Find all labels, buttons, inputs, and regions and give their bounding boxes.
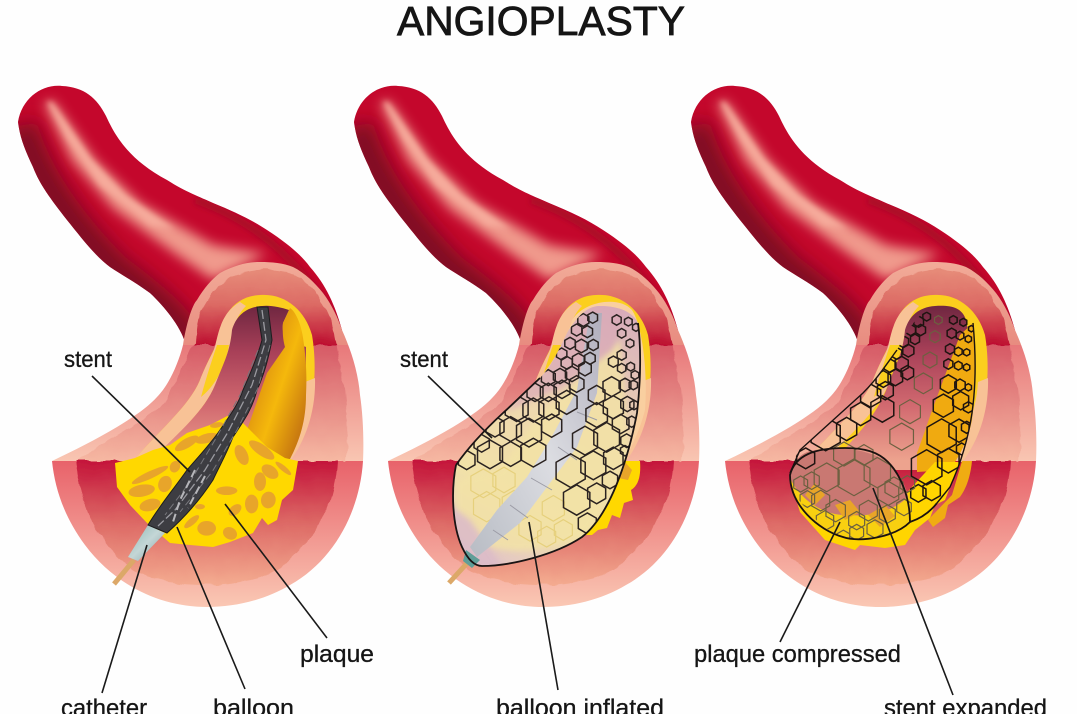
faint stent cells behind the balloon — [471, 467, 572, 547]
catheter sleeve — [463, 550, 480, 568]
faint stent cells inside the lumen and over the plaque — [794, 316, 942, 545]
catheter tip — [114, 560, 134, 584]
label: plaque compressed: plaque compressed — [694, 641, 901, 668]
catheter sleeve — [128, 525, 165, 561]
compressed plaque at the stent mouth — [790, 448, 910, 539]
stent rim — [790, 448, 937, 539]
catheter tip — [449, 561, 469, 583]
leader lines — [92, 376, 953, 695]
compressed plaque drips — [790, 462, 960, 550]
deflated balloon with crimped stent — [148, 307, 272, 533]
plaque mass — [115, 413, 298, 547]
plaque lining — [469, 295, 651, 461]
gold plaque face — [917, 323, 975, 472]
plaque lining — [806, 295, 988, 470]
inflated balloon — [450, 300, 640, 570]
label: stent (panel 1): stent — [64, 346, 113, 372]
balloon catheter shaft — [470, 313, 602, 557]
stent mesh — [458, 312, 639, 534]
label: plaque: plaque — [300, 641, 374, 668]
compressed plaque drips — [582, 461, 640, 535]
plaque lining of the vessel — [133, 295, 315, 461]
stent mesh — [794, 312, 974, 545]
label: stent (panel 2): stent — [400, 346, 449, 372]
plaque chunks — [127, 421, 293, 542]
peach inner lining — [540, 302, 646, 470]
panel: balloon inflated — [354, 86, 700, 607]
panel: catheter and balloon deflated — [0, 70, 380, 611]
panel: stent expanded — [691, 86, 1036, 607]
balloon outline — [453, 323, 640, 566]
stent outer edges — [790, 323, 975, 503]
plaque cutaway gold face — [247, 308, 306, 461]
